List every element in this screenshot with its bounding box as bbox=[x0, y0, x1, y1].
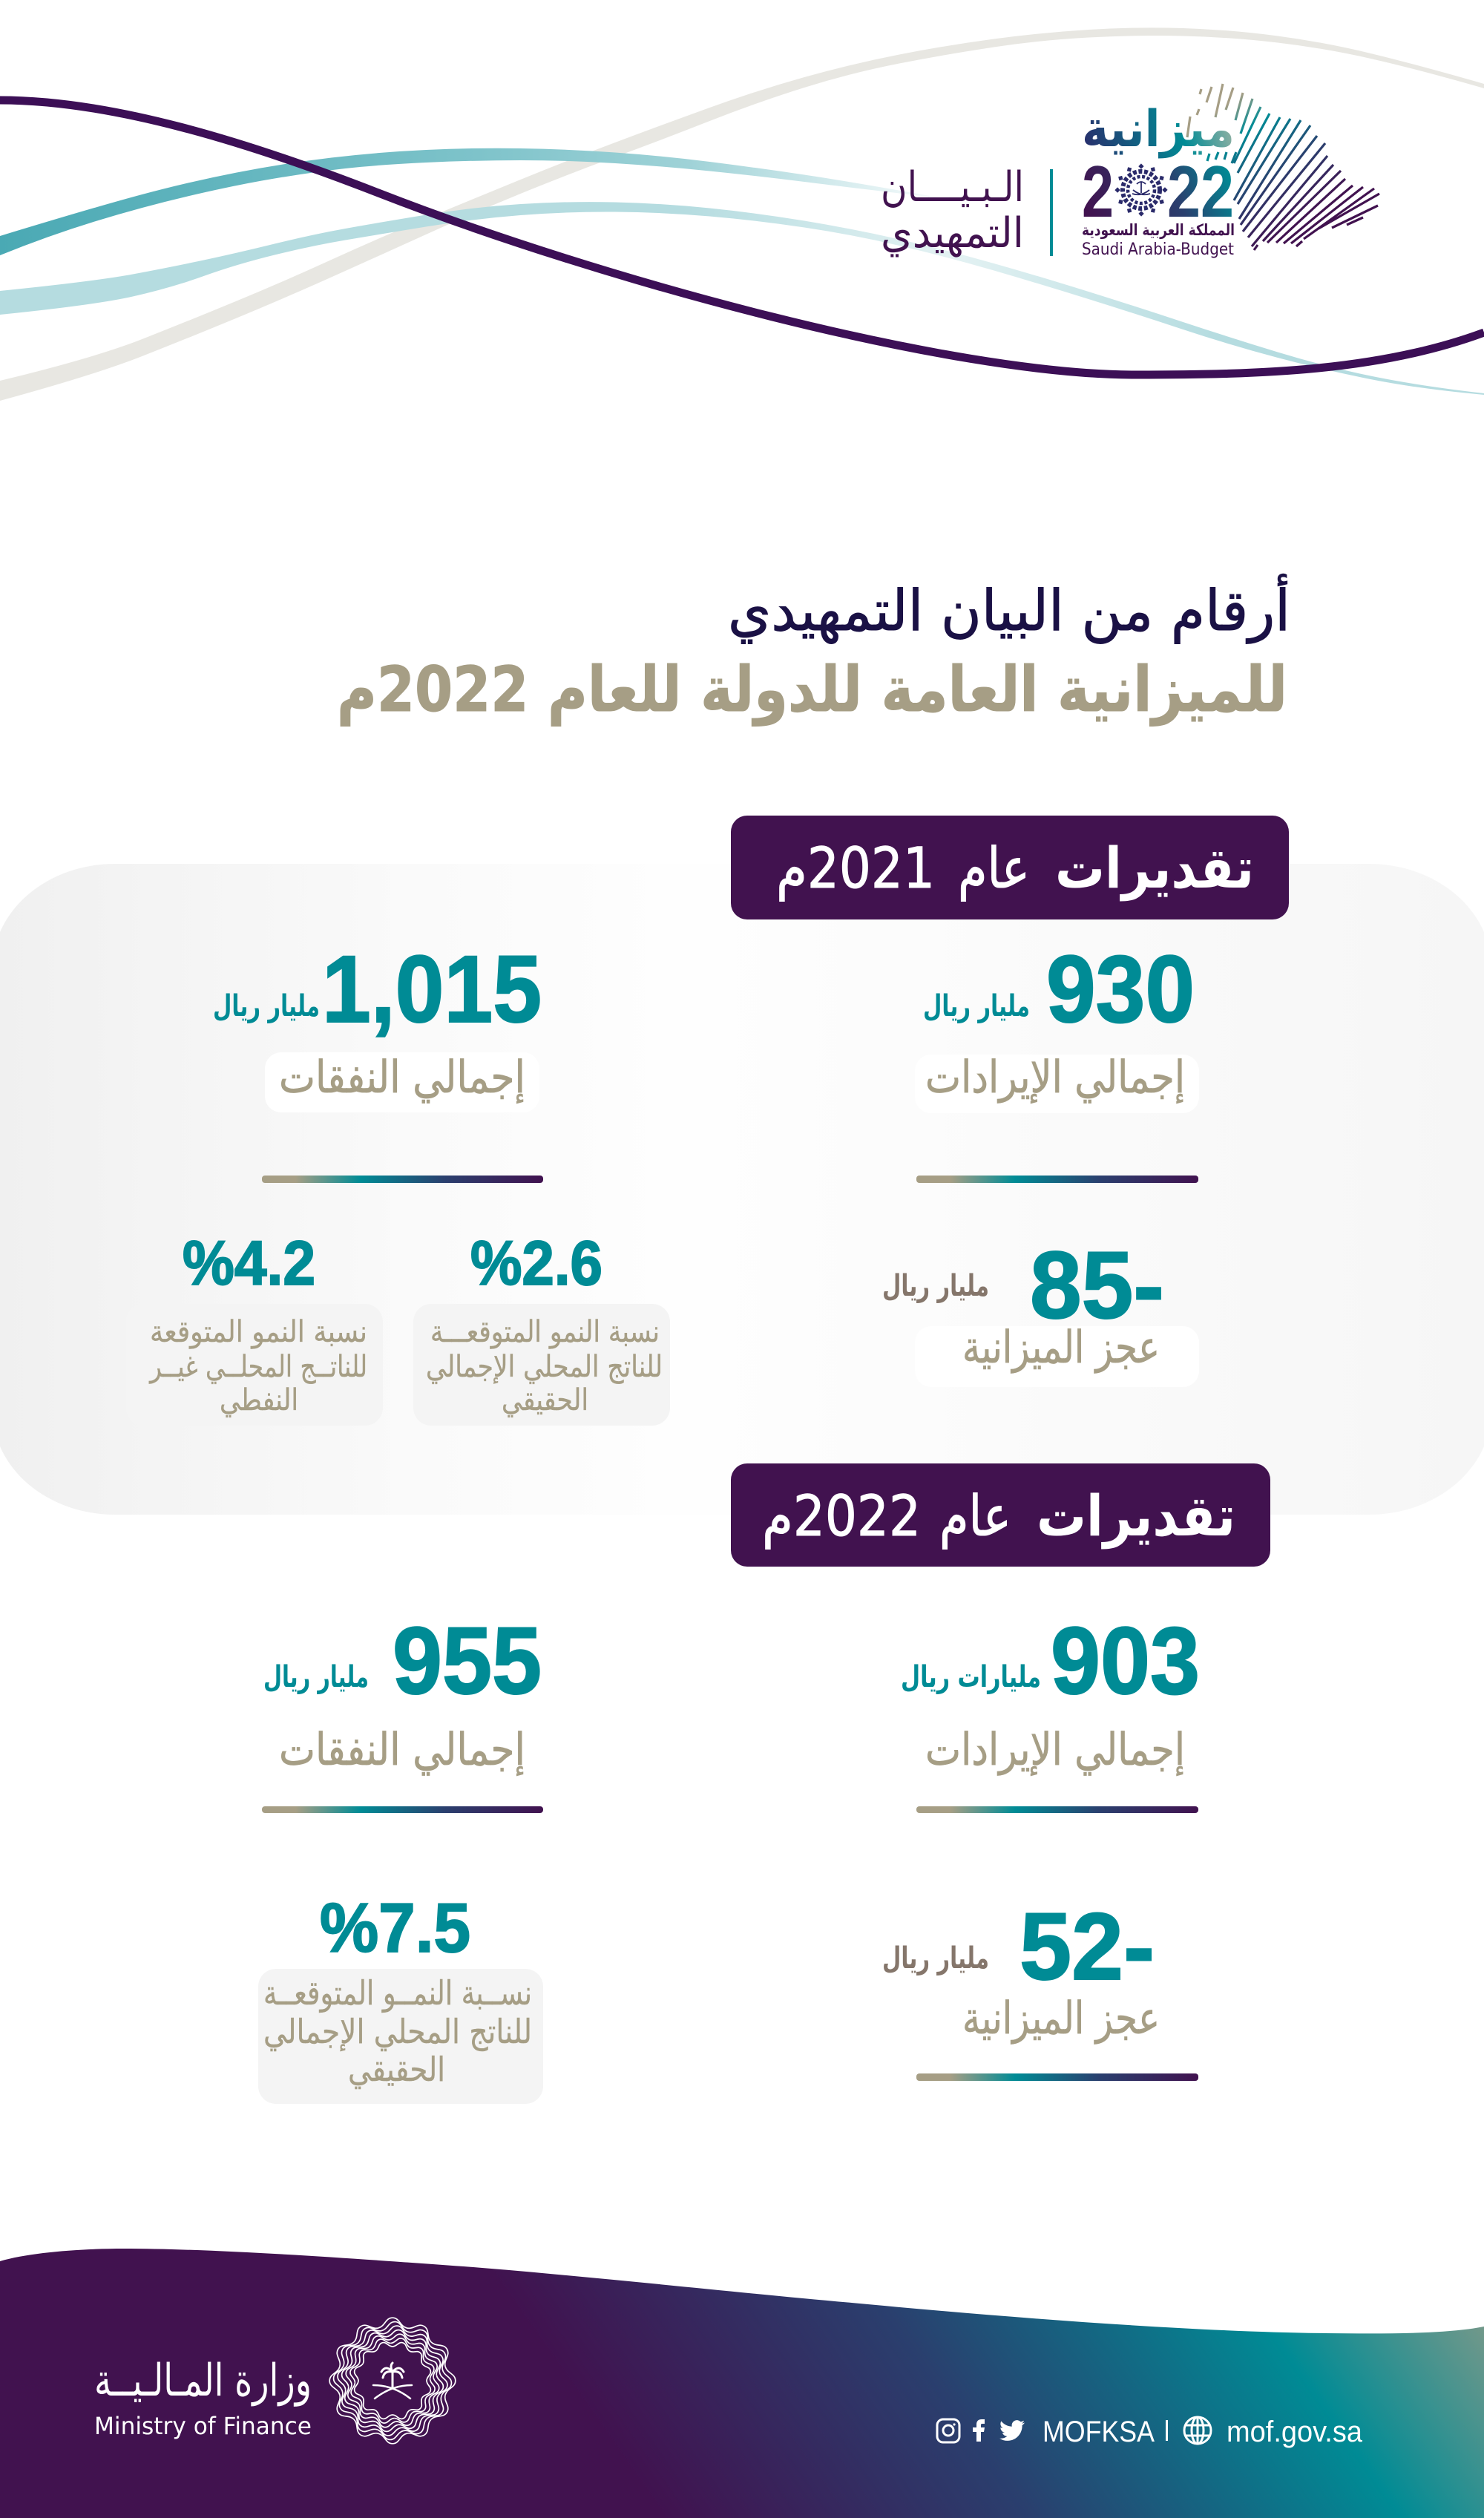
map of Saudi Arabia stripes bbox=[1187, 84, 1379, 250]
stat: 2021 deficit: مليار ريال bbox=[882, 1269, 989, 1303]
gradient divider bbox=[916, 1806, 1198, 1813]
stat: 2022 revenues bbox=[901, 1608, 1200, 1776]
logo: ministry of finance wordmark: Ministry of Finance bbox=[94, 2412, 312, 2440]
logo: ministry of finance wordmark bbox=[94, 2355, 312, 2440]
logo word: budget: ميزانية bbox=[1082, 100, 1235, 159]
stat: 2021 revenues bbox=[915, 937, 1199, 1113]
stat: 2021 non-oil GDP growth: النفطي bbox=[220, 1383, 298, 1417]
stat: 2021 expenditures: 1,015 bbox=[322, 937, 542, 1043]
stat: 2021 real GDP growth: نسبة النمو المتوقعـــة bbox=[430, 1315, 660, 1349]
separator bbox=[1166, 2420, 1168, 2441]
stat: 2021 non-oil GDP growth bbox=[126, 1228, 383, 1426]
preliminary statement label: التمهيدي bbox=[881, 209, 1024, 258]
website: mof.gov.sa bbox=[1227, 2416, 1363, 2448]
stat: 2022 revenues: مليارات ريال bbox=[901, 1660, 1041, 1694]
icon: instagram bbox=[937, 2419, 959, 2442]
stat: 2021 revenues: 930 bbox=[1046, 937, 1195, 1043]
stat: 2021 deficit: عجز الميزانية bbox=[962, 1322, 1160, 1374]
stat: 2021 non-oil GDP growth: نسبة النمو المتوقعة bbox=[150, 1315, 367, 1349]
preliminary statement label: الـبـيــــان bbox=[881, 163, 1024, 212]
stat: 2022 expenditures bbox=[263, 1608, 542, 1776]
decorative header ribbons bbox=[0, 27, 1484, 401]
stat: 2022 expenditures: مليار ريال bbox=[263, 1660, 369, 1694]
gradient divider bbox=[916, 1176, 1198, 1183]
icon: facebook bbox=[973, 2419, 985, 2442]
stat: 2021 deficit bbox=[882, 1233, 1199, 1387]
heading: 2021 estimates bbox=[731, 816, 1289, 919]
stat: 2022 revenues: إجمالي الإيرادات bbox=[925, 1724, 1185, 1776]
stat: 2021 non-oil GDP growth: %4.2 bbox=[183, 1228, 315, 1298]
footer wave band bbox=[0, 2249, 1484, 2518]
preliminary statement label bbox=[881, 163, 1024, 258]
logo: Saudi budget 2022 bbox=[1082, 84, 1379, 259]
stat: 2022 real GDP growth: الحقيقي bbox=[348, 2050, 445, 2089]
title bbox=[337, 574, 1290, 727]
stat: 2022 deficit bbox=[882, 1894, 1160, 2045]
stat: 2022 expenditures: إجمالي النفقات bbox=[279, 1724, 525, 1776]
heading: 2022 estimates: 2022م bbox=[762, 1483, 921, 1549]
stat: 2022 real GDP growth bbox=[258, 1889, 543, 2104]
stat: 2021 real GDP growth: للناتج المحلي الإجمالي bbox=[426, 1350, 663, 1384]
logo divider bbox=[1050, 169, 1053, 256]
stat: 2021 deficit: -85 bbox=[1030, 1233, 1164, 1339]
gradient divider bbox=[916, 2073, 1198, 2081]
stat: 2021 revenues: إجمالي الإيرادات bbox=[925, 1052, 1185, 1104]
icon: ministry emblem bbox=[329, 2318, 456, 2444]
heading: 2022 estimates: عام bbox=[939, 1483, 1011, 1549]
logo year digits 22: 22 bbox=[1167, 151, 1234, 232]
gradient divider bbox=[262, 1806, 543, 1813]
stat: 2021 expenditures bbox=[213, 937, 542, 1112]
icon: globe bbox=[1184, 2417, 1211, 2444]
title: للميزانية العامة للدولة للعام 2022م bbox=[337, 653, 1287, 727]
stat: 2022 real GDP growth: %7.5 bbox=[320, 1889, 470, 1967]
stat: 2022 real GDP growth: للناتج المحلي الإجمالي bbox=[263, 2012, 532, 2051]
heading: 2021 estimates: 2021م bbox=[776, 835, 935, 901]
stat: 2022 deficit: -52 bbox=[1020, 1894, 1155, 2000]
stat: 2021 real GDP growth: الحقيقي bbox=[502, 1383, 588, 1417]
stat: 2021 revenues: مليار ريال bbox=[923, 989, 1030, 1023]
stat: 2021 expenditures: إجمالي النفقات bbox=[279, 1052, 525, 1104]
stat: 2022 real GDP growth: نســبة النمــو المتوقعــة bbox=[263, 1973, 532, 2013]
handle: MOFKSA bbox=[1043, 2416, 1155, 2448]
gradient divider bbox=[262, 1176, 543, 1183]
stat: 2022 deficit: مليار ريال bbox=[882, 1941, 989, 1976]
panel: 2021 estimates background bbox=[0, 864, 1484, 1515]
stat: 2021 real GDP growth bbox=[413, 1228, 670, 1426]
logo English caption: Saudi Arabia-Budget bbox=[1082, 240, 1234, 259]
logo: ministry of finance wordmark: وزارة المـالـيــة bbox=[94, 2355, 312, 2407]
stat: 2021 real GDP growth: %2.6 bbox=[470, 1228, 603, 1298]
icon: twitter bbox=[999, 2420, 1025, 2441]
logo year digit 2: 2 bbox=[1082, 151, 1114, 232]
heading: 2022 estimates bbox=[731, 1463, 1270, 1567]
title: أرقام من البيان التمهيدي bbox=[728, 574, 1290, 644]
stat: 2021 expenditures: مليار ريال bbox=[213, 989, 320, 1023]
stat: 2022 deficit: عجز الميزانية bbox=[962, 1993, 1160, 2045]
stat: 2022 revenues: 903 bbox=[1051, 1608, 1200, 1714]
heading: 2022 estimates: تقديرات bbox=[1037, 1483, 1235, 1550]
logo emblem bbox=[1114, 163, 1168, 217]
stat: 2022 expenditures: 955 bbox=[393, 1608, 542, 1714]
logo Arabic caption: المملكة العربية السعودية bbox=[1082, 221, 1235, 239]
social icons and handle bbox=[937, 2416, 1155, 2448]
stat: 2021 non-oil GDP growth: للناتــج المحلــي غيــر bbox=[148, 1350, 367, 1384]
heading: 2021 estimates: تقديرات bbox=[1055, 835, 1254, 902]
heading: 2021 estimates: عام bbox=[958, 835, 1030, 901]
